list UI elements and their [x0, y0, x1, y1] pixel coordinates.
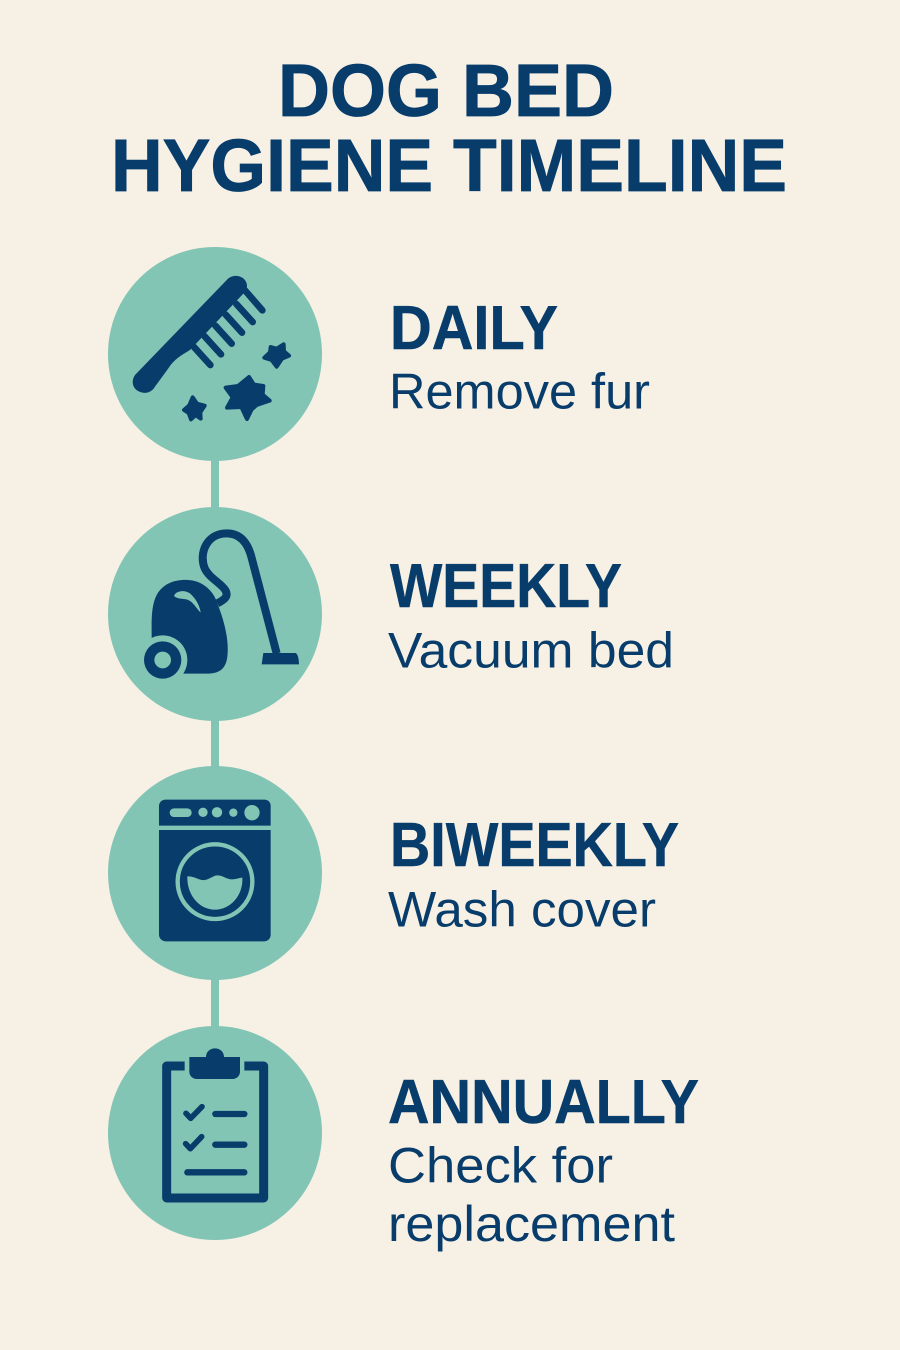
timeline connectors	[211, 455, 219, 1033]
heading: annually: ANNUALLY	[388, 1068, 699, 1137]
step: daily	[108, 247, 650, 461]
icon: clipboard checklist	[108, 1026, 322, 1240]
heading: biweekly: BIWEEKLY	[390, 811, 679, 880]
step: annually	[108, 1026, 699, 1252]
text: vacuum bed: Vacuum bed	[388, 622, 674, 678]
icon: comb and fur	[108, 247, 322, 461]
text: check for replacement: replacement	[388, 1196, 675, 1252]
heading: weekly: WEEKLY	[390, 552, 622, 621]
step: weekly	[108, 507, 674, 721]
icon: vacuum cleaner	[108, 507, 322, 721]
text: remove fur: Remove fur	[389, 364, 650, 420]
text: check for replacement	[388, 1138, 675, 1252]
text: wash cover: Wash cover	[388, 882, 656, 938]
title	[111, 49, 787, 207]
title: DOG BED	[278, 49, 614, 132]
text: check for replacement: Check for	[388, 1138, 613, 1194]
step: biweekly	[108, 766, 679, 980]
heading: daily: DAILY	[390, 294, 558, 363]
title: HYGIENE TIMELINE	[111, 124, 787, 207]
icon: washing machine	[108, 766, 322, 980]
